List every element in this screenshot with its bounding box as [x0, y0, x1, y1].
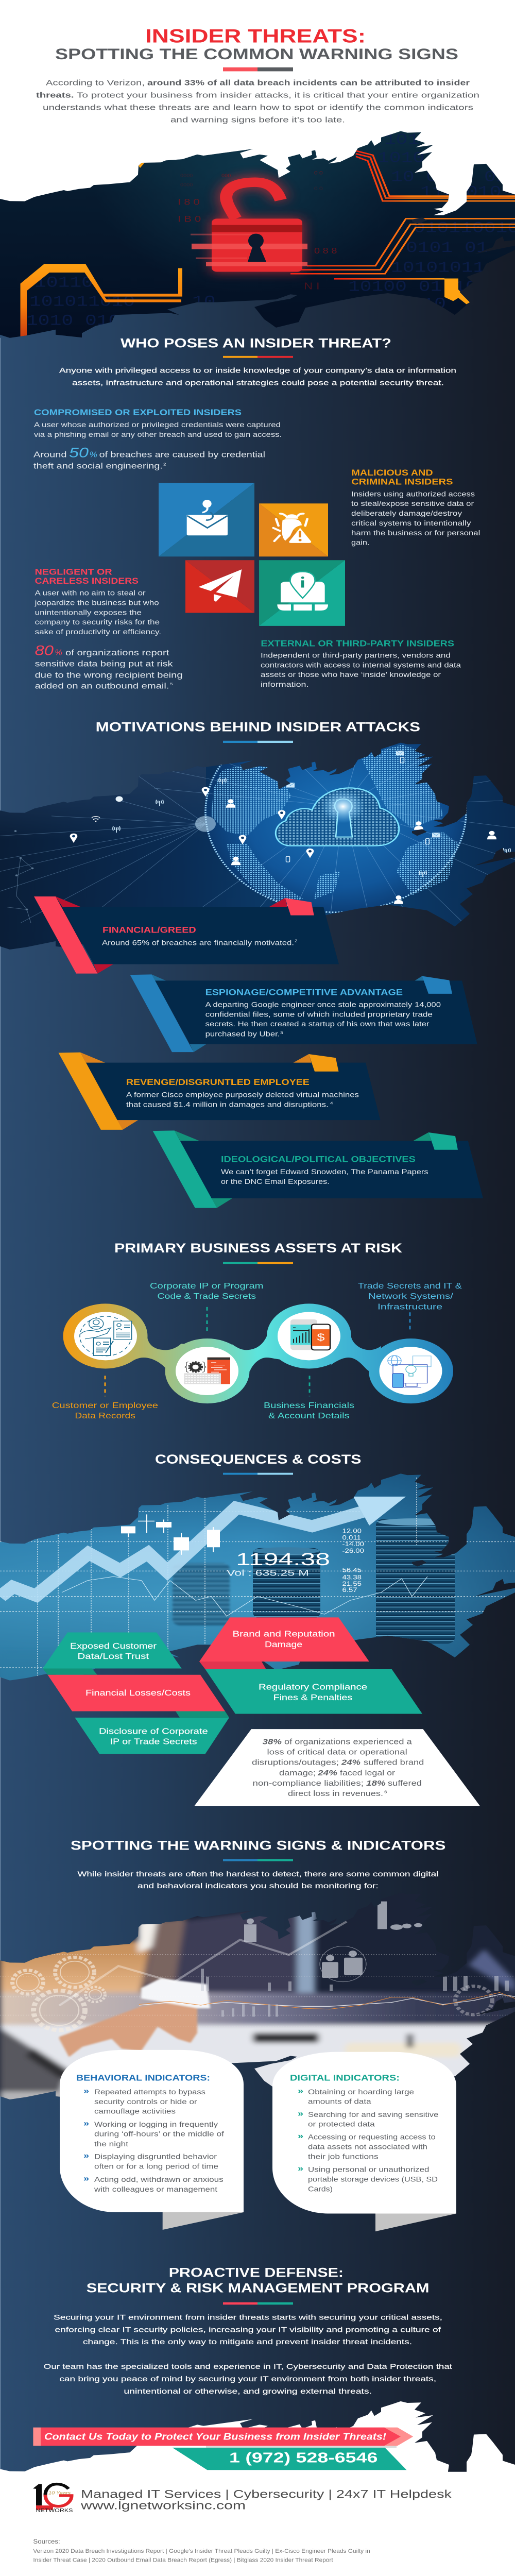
- malicious insiders text: deliberately damage/destroy: [351, 510, 462, 518]
- blurred coin stack: [173, 1563, 230, 1625]
- negligent insiders text: A user with no aim to steal or: [35, 589, 146, 597]
- card: behavioral indicators: BEHAVIORAL INDICATORS:: [76, 2073, 210, 2082]
- negligent insiders text: [35, 567, 183, 690]
- asset labels: Trade Secrets and IT &: [358, 1281, 462, 1291]
- company logo: [33, 2484, 73, 2514]
- asset labels: Network Systems/: [368, 1292, 453, 1301]
- asset labels: Infrastructure: [377, 1302, 442, 1311]
- hand and shirt cuff: [59, 1978, 210, 2057]
- malicious insiders text: harm the business or for personal: [351, 530, 480, 537]
- card: espionage: [130, 974, 477, 1052]
- card: espionage: A departing Google engineer once stole approximately 14,000: [205, 1001, 441, 1009]
- card: behavioral indicators: Acting odd, withdrawn or anxious: [94, 2176, 224, 2183]
- malicious insiders text: gain.: [351, 539, 370, 547]
- asset icon: customer records: [74, 1312, 137, 1360]
- gears: [12, 1957, 492, 2030]
- chart bars: [201, 1969, 509, 2016]
- card: revenge: that caused $1.4 million in damages and disruptions.: [126, 1101, 329, 1109]
- card: digital indicators: »: [298, 2164, 303, 2173]
- statistics callout: 38%: [263, 1737, 282, 1746]
- card: behavioral indicators: often or for a long period of time: [94, 2163, 218, 2171]
- statistics callout: loss of critical data or operational: [267, 1748, 407, 1756]
- binary digits: 10 0: [391, 169, 438, 186]
- light rays: [0, 744, 515, 923]
- card: revenge: A former Cisco employee purposely deleted virtual machines: [126, 1091, 359, 1099]
- paragraph one: change. This is the only way to mitigate and prevent insider threat incidents.: [83, 2338, 412, 2346]
- price readouts: Vol : 635.25 M: [227, 1568, 309, 1578]
- company tagline: www.lgnetworksinc.com: [80, 2499, 246, 2512]
- statistics callout: disruptions/outages;: [252, 1758, 339, 1767]
- card: behavioral indicators: »: [83, 2174, 89, 2183]
- price readouts: 1194.38: [236, 1550, 330, 1569]
- external insiders text: assets or those who have ‘inside’ knowledge or: [261, 671, 441, 679]
- asset icon: code and keyboard: [176, 1347, 238, 1395]
- binary digits: 10110: [35, 275, 93, 292]
- binary digits: 010: [466, 184, 501, 201]
- asset icon: mobile finance: [278, 1312, 340, 1360]
- negligent insiders text: jeopardize the business but who: [35, 599, 159, 607]
- card: digital indicators: or protected data: [308, 2121, 375, 2128]
- card: digital indicators: Using personal or unauthorized: [308, 2166, 429, 2174]
- consequence: brand damage: [199, 1617, 369, 1669]
- asset chain shape: [63, 1303, 453, 1403]
- asset labels: Data Records: [75, 1411, 135, 1420]
- heading: WHO POSES AN INSIDER THREAT?: [121, 336, 391, 351]
- sources: [33, 2538, 370, 2563]
- divider: [223, 2302, 293, 2304]
- negligent insiders text: 5: [170, 682, 173, 686]
- padlock glow: [212, 182, 302, 272]
- consequence: brand damage: Damage: [265, 1640, 302, 1649]
- title divider: [223, 67, 293, 71]
- statistics callout: 24%: [341, 1758, 360, 1767]
- globe: [204, 743, 467, 913]
- heading: MOTIVATIONS BEHIND INSIDER ATTACKS: [96, 720, 420, 735]
- heading: CONSEQUENCES & COSTS: [155, 1452, 361, 1467]
- statistics callout: direct loss in revenues.: [288, 1789, 383, 1798]
- section intro: [59, 366, 456, 387]
- card: ideological: or the DNC Email Exposures.: [221, 1178, 330, 1185]
- statistics callout: damage;: [279, 1769, 316, 1777]
- intro paragraph: and warning signs before it’s too late.: [170, 116, 345, 124]
- section intro: [77, 1870, 438, 1890]
- card: digital indicators: »: [298, 2131, 303, 2141]
- statistics callout: non-compliance liabilities;: [252, 1779, 364, 1787]
- paragraph one: enforcing clear IT security policies, increasing your IT visibility and promoting a culture of: [55, 2326, 441, 2334]
- company tagline: Managed IT Services | Cybersecurity | 24x7 IT Helpdesk: [81, 2488, 452, 2501]
- card: espionage: purchased by Uber.: [205, 1030, 280, 1038]
- statistics callout: 6: [384, 1790, 387, 1794]
- external insiders text: information.: [261, 681, 308, 688]
- icon tile: laptop with info pin: [259, 560, 345, 626]
- negligent insiders text: 80: [35, 642, 54, 658]
- hero map: unlocked padlock over circuit traces: [0, 127, 515, 341]
- negligent insiders text: sake of productivity or efficiency.: [35, 629, 161, 636]
- card: espionage: ESPIONAGE/COMPETITIVE ADVANTAGE: [205, 988, 403, 997]
- card: ideological: IDEOLOGICAL/POLITICAL OBJECTIVES: [221, 1155, 416, 1164]
- external insiders text: EXTERNAL OR THIRD-PARTY INSIDERS: [261, 639, 454, 648]
- card: behavioral indicators: »: [83, 2151, 89, 2160]
- company logo: 10 Years: [48, 2491, 71, 2496]
- consequence: exposed customer data: Exposed Customer: [70, 1641, 157, 1651]
- negligent insiders text: of organizations report: [65, 648, 169, 657]
- card: digital indicators: portable storage devices (USB, SD: [308, 2176, 438, 2183]
- heading: [87, 2265, 430, 2296]
- consequence: exposed customer data: Data/Lost Trust: [77, 1652, 149, 1661]
- candlesticks: [121, 1514, 220, 1555]
- icon tile: bug with warning: [259, 503, 328, 556]
- card: digital indicators: »: [298, 2087, 303, 2095]
- price readouts: -14.00: [342, 1541, 364, 1548]
- external insiders text: contractors with access to internal systems and data: [261, 662, 461, 669]
- map: financial chart and coin stacks: [0, 1470, 515, 1687]
- negligent insiders text: added on an outbound email.: [35, 682, 169, 690]
- compromised insiders text: theft and social engineering.: [33, 461, 163, 470]
- external insiders text: [261, 639, 461, 688]
- globe glow node: [195, 816, 216, 832]
- card: behavioral indicators: with colleagues or management: [94, 2186, 218, 2193]
- card: behavioral indicators: security controls or hide or: [94, 2098, 197, 2106]
- statistics callout: faced legal or: [340, 1769, 395, 1777]
- asset labels: & Account Details: [268, 1411, 350, 1420]
- heading: SPOTTING THE WARNING SIGNS & INDICATORS: [71, 1838, 445, 1853]
- asset labels: Business Financials: [264, 1401, 354, 1410]
- red glitch glyphs: 0 0: [314, 171, 323, 176]
- heading: PRIMARY BUSINESS ASSETS AT RISK: [114, 1241, 402, 1256]
- heading: PROACTIVE DEFENSE:: [169, 2265, 344, 2280]
- negligent insiders text: NEGLIGENT OR: [35, 567, 112, 577]
- card: digital indicators: [272, 2052, 456, 2231]
- section intro: While insider threats are often the hardest to detect, there are some common digital: [77, 1870, 438, 1878]
- red glitch glyphs: 0 0: [314, 186, 323, 192]
- sources: Insider Threat Case | 2020 Outbound Email Data Breach Report (Egress) | Bitglass 2020 Insider Threat Report: [33, 2557, 333, 2563]
- malicious insiders text: Insiders using authorized access: [351, 490, 475, 498]
- card: digital indicators: amounts of data: [308, 2098, 371, 2106]
- sources: Sources:: [33, 2538, 60, 2545]
- malicious insiders text: to steal/expose sensitive data or: [351, 500, 474, 508]
- negligent insiders text: sensitive data being put at risk: [35, 659, 173, 668]
- consequence: trade secret disclosure: Disclosure of Corporate: [99, 1727, 208, 1736]
- section intro: and behavioral indicators you should be monitoring for:: [138, 1882, 379, 1890]
- card: financial greed: Around 65% of breaches are financially motivated.: [102, 939, 294, 947]
- statistics callout: 18%: [366, 1779, 386, 1787]
- red glitch glyphs: [178, 171, 337, 292]
- price readouts: [227, 1528, 364, 1594]
- red glitch glyphs: 0000: [180, 182, 193, 188]
- binary digits: 10: [192, 294, 216, 311]
- intro paragraph: To protect your business from insider attacks, it is critical that your entire organization: [77, 91, 479, 99]
- red glitch glyphs: 000: [221, 174, 231, 178]
- card: digital indicators: Searching for and saving sensitive: [308, 2111, 438, 2119]
- dashed grid lines: [0, 1478, 515, 1687]
- red glitch glyphs: 0000: [180, 174, 193, 178]
- section: spotting the warning signs: [0, 1838, 515, 2231]
- asset icon: IT infrastructure: [379, 1347, 442, 1395]
- icon tile: paper plane: [185, 560, 254, 613]
- card: behavioral indicators: the night: [94, 2141, 129, 2148]
- price readouts: 0.011: [342, 1534, 361, 1541]
- call to action banner: [33, 2428, 413, 2448]
- call to action banner: Contact Us Today to Protect Your Business from Insider Threats!: [44, 2431, 386, 2442]
- circuit traces: [290, 151, 515, 279]
- red glitch glyphs: N I: [304, 281, 320, 292]
- consequence: financial losses: [47, 1675, 229, 1718]
- intro paragraph: [36, 78, 479, 124]
- card: revenge: [59, 1053, 380, 1130]
- binary digits: 1010: [377, 150, 424, 167]
- large coin stack: [376, 1518, 455, 1643]
- asset labels: Code & Trade Secrets: [158, 1292, 256, 1301]
- negligent insiders text: %: [55, 648, 62, 657]
- price readouts: -26.00: [342, 1548, 364, 1554]
- phone number: [173, 2448, 407, 2470]
- card: espionage: 3: [280, 1030, 283, 1035]
- divider: [223, 356, 293, 358]
- card: digital indicators: »: [298, 2109, 303, 2118]
- icon tile: phishing email: [159, 483, 254, 556]
- binary digits: 110: [420, 184, 455, 201]
- negligent insiders text: due to the wrong recipient being: [35, 671, 183, 680]
- divider: [223, 1473, 293, 1475]
- consequence: regulatory fines: Regulatory Compliance: [259, 1682, 367, 1691]
- binary digits: 101: [384, 132, 419, 149]
- compromised insiders text: of breaches are caused by credential: [99, 450, 265, 459]
- statistics callout: suffered brand: [364, 1758, 424, 1767]
- negligent insiders text: company to security risks for the: [35, 619, 160, 626]
- card: digital indicators: their job functions: [308, 2153, 379, 2161]
- card: behavioral indicators: »: [83, 2119, 89, 2128]
- card: behavioral indicators: Repeated attempts to bypass: [94, 2089, 205, 2096]
- binary digits: 10101011: [391, 260, 485, 277]
- binary digits: [26, 132, 515, 330]
- red glitch glyphs: I B 0: [178, 214, 201, 224]
- header block: [36, 26, 479, 124]
- subtitle: SPOTTING THE COMMON WARNING SIGNS: [55, 46, 458, 63]
- section: motivations: [0, 711, 515, 1208]
- divider: [223, 1859, 293, 1861]
- consequence: exposed customer data: [43, 1633, 182, 1675]
- compromised insiders text: via a phishing email or any other breach and used to gain access.: [34, 431, 282, 439]
- consequence: regulatory fines: Fines & Penalties: [273, 1693, 352, 1702]
- divider: [223, 741, 293, 743]
- card: ideological: [153, 1130, 483, 1208]
- red glitch glyphs: 0 8 8: [314, 246, 337, 256]
- card: digital indicators: Accessing or requesting access to: [308, 2133, 436, 2141]
- paragraph one: Securing your IT environment from insider threats starts with securing your critical assets,: [54, 2313, 442, 2321]
- network constellation: [7, 831, 33, 923]
- card: revenge: 4: [330, 1101, 333, 1105]
- negligent insiders text: CARELESS INSIDERS: [35, 576, 139, 585]
- card: digital indicators: Cards): [308, 2185, 333, 2193]
- map: businessman typing on laptop: [0, 1890, 515, 2104]
- white map footer shape: [0, 2401, 515, 2576]
- consequence: brand damage: Brand and Reputation: [233, 1630, 335, 1638]
- asset labels: [52, 1281, 462, 1420]
- compromised insiders text: COMPROMISED OR EXPLOITED INSIDERS: [34, 408, 242, 417]
- card: behavioral indicators: camouflage activities: [94, 2108, 176, 2115]
- divider: [223, 1262, 293, 1264]
- card: behavioral indicators: »: [83, 2087, 89, 2095]
- card: behavioral indicators: Displaying disgruntled behavior: [94, 2154, 217, 2161]
- section intro: assets, infrastructure and operational strategies could pose a potential security threat.: [72, 379, 444, 387]
- consequence: regulatory fines: [205, 1669, 422, 1714]
- binary digits: 1010 010: [26, 313, 120, 330]
- thin chart line: [62, 1577, 427, 1616]
- company logo: NETWORKS: [36, 2508, 73, 2514]
- intro paragraph: threats.: [36, 91, 74, 99]
- intro paragraph: understands what these threats are and learn how to spot or identify the common indicators: [43, 103, 473, 112]
- card: financial greed: FINANCIAL/GREED: [102, 925, 196, 935]
- section intro: Anyone with privileged access to or inside knowledge of your company’s data or information: [59, 366, 456, 375]
- statistics callout: [195, 1729, 480, 1806]
- consequence: trade secret disclosure: IP or Trade Secrets: [110, 1737, 197, 1746]
- intro paragraph: around 33% of all data breach incidents can be attributed to insider: [147, 78, 470, 87]
- map: globe and locked cloud network: [0, 743, 515, 950]
- malicious insiders text: MALICIOUS AND: [351, 468, 433, 477]
- price readouts: 12.00: [342, 1528, 362, 1534]
- card: ideological: We can’t forget Edward Snowden, The Panama Papers: [221, 1168, 428, 1176]
- business people icons: [244, 1902, 422, 1982]
- statistics callout: 24%: [317, 1769, 337, 1777]
- card: behavioral indicators: Working or logging in frequently: [94, 2121, 218, 2129]
- card: financial greed: 2: [295, 938, 298, 943]
- card: digital indicators: data assets not associated with: [308, 2143, 427, 2151]
- binary digits: 101011010: [29, 294, 135, 311]
- malicious insiders text: critical systems to intentionally: [351, 520, 471, 527]
- statistics callout: of organizations experienced a: [284, 1737, 412, 1746]
- dashed connectors: [105, 1307, 410, 1396]
- blurred office photo: [0, 1902, 515, 2104]
- padlock: [191, 182, 307, 272]
- binary digits: 10100 01 10: [348, 279, 477, 296]
- company tagline: [80, 2488, 452, 2512]
- section: primary business assets: [52, 1241, 462, 1420]
- section: proactive defense: [44, 2265, 452, 2395]
- price readouts: 43.38: [342, 1574, 362, 1581]
- sources: Verizon 2020 Data Breach Investigations Report | Google’s Insider Threat Pleads Guilty | Ex-Cisco Engineer Pleads Guilty in: [33, 2548, 370, 2554]
- consequence: financial losses: Financial Losses/Costs: [85, 1688, 191, 1698]
- card: revenge: REVENGE/DISGRUNTLED EMPLOYEE: [126, 1078, 310, 1087]
- malicious insiders text: [351, 468, 480, 547]
- section: consequences and costs: [0, 1452, 515, 1806]
- title: INSIDER THREATS:: [145, 26, 366, 47]
- card: espionage: secrets. He then created a startup of his own that was later: [205, 1021, 430, 1028]
- chart overlay: [0, 1922, 515, 2026]
- paragraph one: [54, 2313, 442, 2346]
- network icons: [70, 751, 510, 904]
- statistics callout: suffered: [388, 1779, 422, 1787]
- compromised insiders text: A user whose authorized or privileged credentials were captured: [34, 421, 281, 429]
- asset labels: Customer or Employee: [52, 1401, 158, 1410]
- card: digital indicators: Obtaining or hoarding large: [308, 2089, 414, 2096]
- paragraph two: Our team has the specialized tools and experience in IT, Cybersecurity and Data Protection that: [44, 2363, 452, 2370]
- binary digits: 01010: [387, 296, 446, 313]
- compromised insiders text: 2: [163, 462, 166, 466]
- intro paragraph: According to Verizon,: [46, 78, 145, 87]
- compromised insiders text: %: [90, 450, 97, 459]
- external insiders text: Independent or third-party partners, vendors and: [261, 652, 451, 659]
- price readouts: 21.55: [342, 1580, 362, 1587]
- paragraph two: unintentional or otherwise, and growing external threats.: [124, 2387, 372, 2395]
- cloud with keyhole: [276, 788, 399, 846]
- paragraph two: can bring you peace of mind by securing your IT environment from both insider threats,: [59, 2375, 436, 2383]
- card: digital indicators: DIGITAL INDICATORS:: [290, 2073, 400, 2082]
- binary digits: 01: [484, 169, 508, 186]
- heading: SECURITY & RISK MANAGEMENT PROGRAM: [87, 2281, 430, 2296]
- section: who poses an insider threat: [33, 336, 480, 690]
- card: espionage: confidential files, some of which included proprietary trade: [205, 1011, 433, 1019]
- card: financial greed: [34, 896, 339, 974]
- asset labels: Corporate IP or Program: [150, 1281, 264, 1291]
- middle coin stack: [253, 1547, 320, 1618]
- paragraph two: [44, 2363, 452, 2395]
- negligent insiders text: unintentionally exposes the: [35, 609, 142, 617]
- asset icon: mobile finance: $: [317, 1332, 325, 1344]
- malicious insiders text: CRIMINAL INSIDERS: [351, 477, 453, 486]
- price readouts: 56.45: [342, 1567, 362, 1573]
- card: behavioral indicators: [60, 2050, 244, 2230]
- compromised insiders text: 50: [69, 445, 89, 461]
- price readouts: 6.57: [342, 1587, 357, 1594]
- phone number: 1 (972) 528-6546: [229, 2449, 377, 2465]
- compromised insiders text: [33, 408, 282, 470]
- red glitch glyphs: I 8 0: [178, 197, 200, 207]
- rising arrow: [0, 1497, 406, 1597]
- binary digits: 0101 01: [406, 240, 488, 257]
- compromised insiders text: Around: [33, 450, 66, 459]
- consequence: trade secret disclosure: [75, 1718, 229, 1754]
- card: behavioral indicators: during ‘off-hours’ or the middle of: [94, 2130, 225, 2138]
